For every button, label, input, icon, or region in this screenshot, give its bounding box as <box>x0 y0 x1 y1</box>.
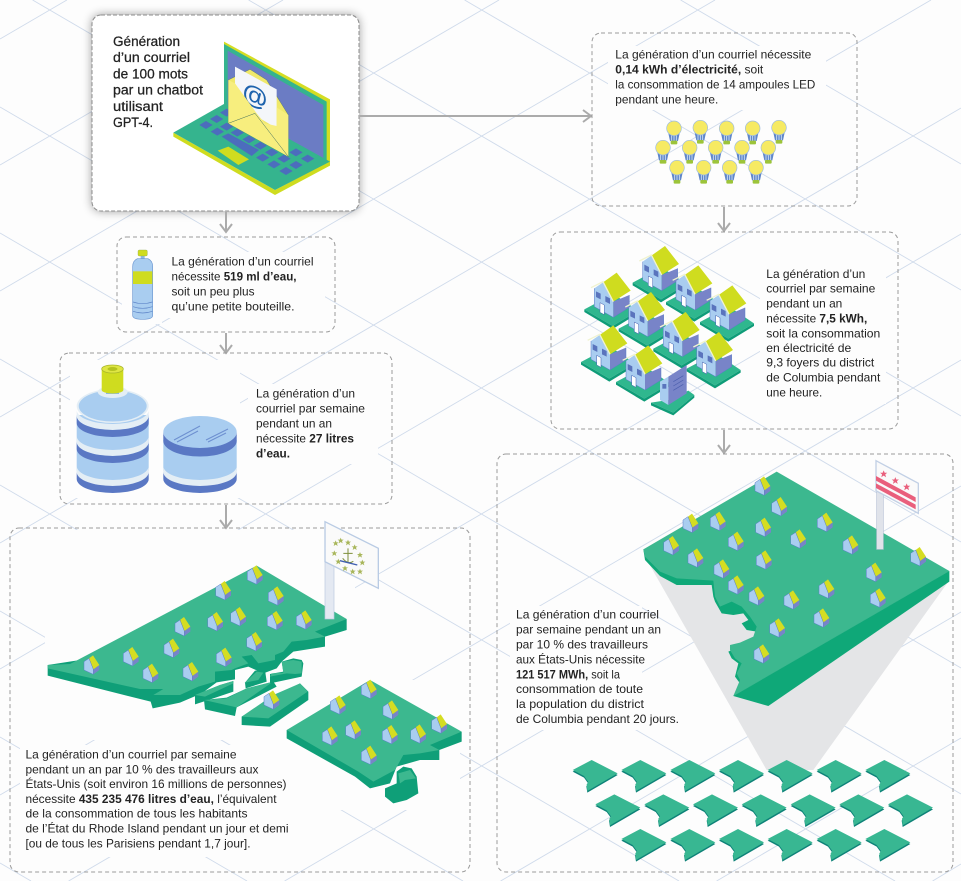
icon: twenty small maps <box>573 760 933 862</box>
text: District of Columbia caption: consommation de toute <box>516 682 643 696</box>
text: Rhode Island caption: [ou de tous les Parisiens pendant 1,7 jour]. <box>26 837 250 851</box>
heading: prompt text: Génération <box>113 34 180 49</box>
text: Rhode Island caption <box>26 747 288 851</box>
text: houses caption: 9,3 foyers du district <box>766 356 875 370</box>
text: jugs caption: d’eau. <box>256 446 290 460</box>
text: houses caption: soit la consommation <box>766 326 880 340</box>
map: Rhode Island mainland and islands <box>48 565 462 803</box>
icon: District of Columbia flag <box>876 461 918 549</box>
text: houses caption: pendant un an <box>766 297 842 311</box>
text: District of Columbia caption: aux États-Unis nécessite <box>516 651 645 666</box>
heading: prompt text: de 100 mots <box>113 66 188 82</box>
text: District of Columbia caption <box>516 608 679 726</box>
map: District of Columbia <box>643 472 949 706</box>
text: bulbs caption <box>615 48 816 106</box>
text: Rhode Island caption: nécessite 435 235 476 litres d’eau, l’équivalent <box>26 792 277 806</box>
icon: Rhode Island flag <box>325 522 378 619</box>
text: jugs caption: pendant un an <box>256 416 332 430</box>
panel: Rhode Island <box>10 522 470 872</box>
arrow: bulbs to houses <box>718 207 730 231</box>
panel: chatbot prompt <box>92 15 359 211</box>
text: bulbs caption: 0,14 kWh d’électricité, soit <box>615 62 764 76</box>
arrow: prompt to electricity <box>360 110 591 122</box>
text: bottle caption: nécessite 519 ml d’eau, <box>172 270 296 284</box>
icon: group of houses <box>581 246 754 415</box>
text: houses caption: courriel par semaine <box>766 282 876 296</box>
heading: prompt text: par un chatbot <box>113 83 203 98</box>
heading: prompt text: utilisant <box>113 99 163 114</box>
text: Rhode Island caption: pendant un an par 10 % des travailleurs aux <box>26 762 258 776</box>
panel: small bottle <box>117 237 335 332</box>
panel: houses <box>551 232 898 429</box>
icon: laptop with envelope: @ <box>243 76 267 115</box>
icon: partial water jug <box>163 416 237 493</box>
arrow: prompt to water <box>220 212 232 232</box>
text: bottle caption: soit un peu plus <box>172 285 254 299</box>
icon: laptop with envelope <box>173 42 330 195</box>
text: District of Columbia caption: de Columbia pendant 20 jours. <box>516 712 679 726</box>
text: District of Columbia caption: La génération d’un courriel <box>516 608 659 622</box>
panel: water jugs <box>60 353 392 504</box>
text: Rhode Island caption: La génération d’un courriel par semaine <box>26 747 237 761</box>
arrow: bottle to jugs <box>220 333 232 353</box>
text: bottle caption: qu’une petite bouteille. <box>172 299 294 313</box>
text: bulbs caption: La génération d’un courriel nécessite <box>615 48 812 62</box>
text: houses caption: La génération d’un <box>766 267 865 281</box>
heading: prompt text: d’un courriel <box>113 50 190 65</box>
text: bulbs caption: la consommation de 14 ampoules LED <box>615 77 816 91</box>
text: houses caption: nécessite 7,5 kWh, <box>766 311 867 325</box>
heading: prompt text: GPT-4. <box>113 115 153 130</box>
panel: LED bulbs <box>592 33 857 206</box>
text: bottle caption <box>172 255 314 313</box>
arrow: jugs to Rhode Island <box>220 505 232 528</box>
text: Rhode Island caption: États-Unis (soit environ 16 millions de personnes) <box>26 776 286 791</box>
icon: water bottle <box>133 250 153 319</box>
light cone from map to small maps <box>645 557 948 770</box>
text: jugs caption <box>256 387 365 460</box>
text: District of Columbia caption: par semaine pendant un an <box>516 623 661 637</box>
text: District of Columbia caption: par 10 % des travailleurs <box>516 637 648 651</box>
icon: large water jug <box>77 365 149 493</box>
text: houses caption: une heure. <box>766 386 822 400</box>
panel: District of Columbia <box>497 454 953 872</box>
text: houses caption <box>766 267 881 400</box>
icon: fourteen LED bulbs <box>656 120 786 184</box>
arrow: houses to District of Columbia <box>718 430 730 453</box>
text: bulbs caption: pendant une heure. <box>615 92 718 106</box>
text: houses caption: de Columbia pendant <box>766 371 881 385</box>
text: jugs caption: courriel par semaine <box>256 402 365 416</box>
text: bottle caption: La génération d’un courriel <box>172 255 314 269</box>
text: Rhode Island caption: de l’État du Rhode Island pendant un jour et demi <box>26 821 288 836</box>
text: District of Columbia caption: 121 517 MWh, soit la <box>516 667 620 681</box>
heading: prompt text <box>113 34 203 130</box>
text: jugs caption: nécessite 27 litres <box>256 431 354 445</box>
text: houses caption: en électricité de <box>766 341 852 355</box>
text: Rhode Island caption: de la consommation de tous les habitants <box>26 807 248 821</box>
text: District of Columbia caption: la population du district <box>516 697 645 711</box>
text: jugs caption: La génération d’un <box>256 387 355 401</box>
